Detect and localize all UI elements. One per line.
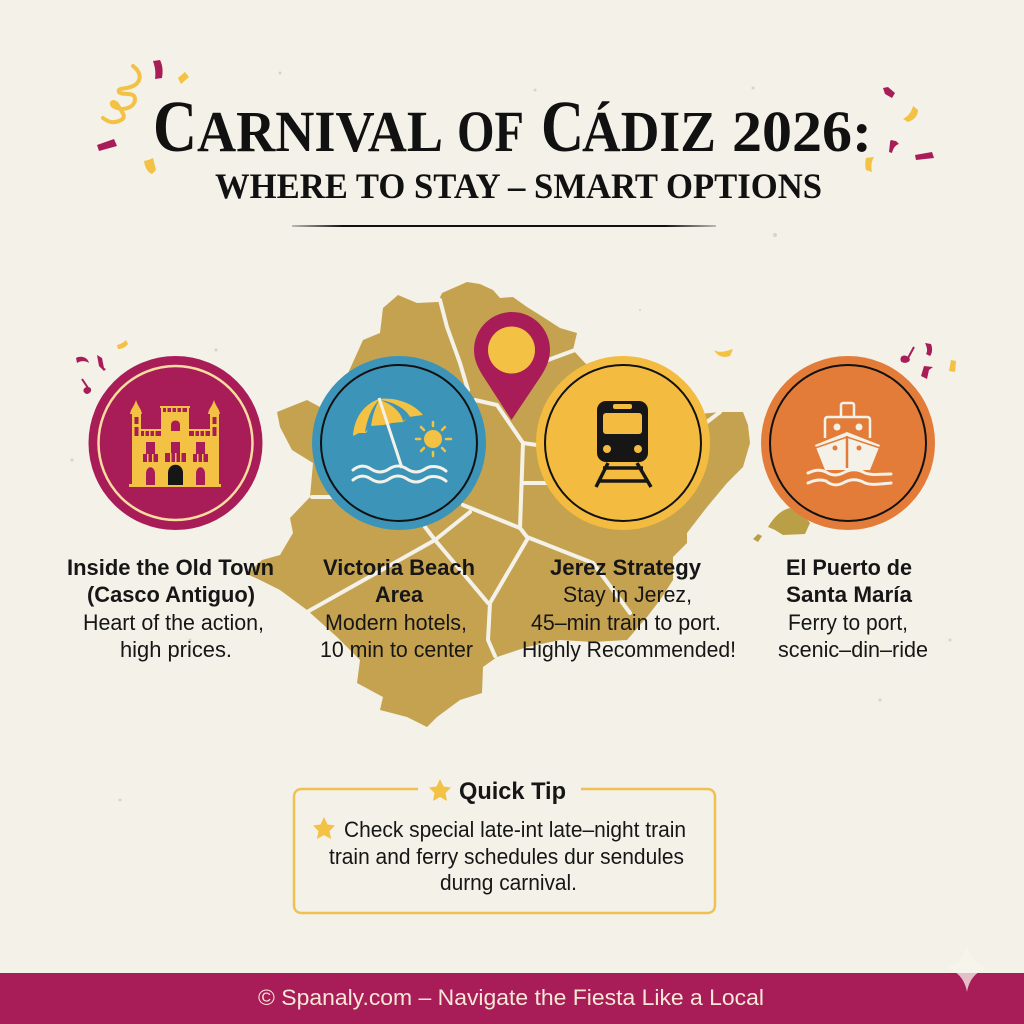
text block: el puerto: scenic–din–ride	[778, 637, 928, 662]
tip heading: Quick Tip	[459, 778, 566, 805]
confetti: above map right	[714, 349, 733, 357]
callout: quick tip	[294, 778, 715, 913]
text block: old town: Inside the Old Town	[67, 555, 274, 580]
icon: beach umbrella	[312, 356, 486, 530]
text block: el puerto: Ferry to port,	[788, 610, 908, 635]
confetti: top right	[865, 87, 934, 172]
confetti: left of old town	[76, 340, 128, 393]
text block: old town: high prices.	[120, 637, 232, 662]
text block: victoria beach: Area	[375, 582, 424, 607]
tip body	[329, 817, 686, 895]
icon: old town castle	[88, 356, 262, 530]
text block: old town: (Casco Antiguo)	[87, 582, 255, 607]
map: district borders	[307, 300, 720, 656]
main heading: ARNIVAL	[197, 99, 443, 164]
title	[153, 86, 872, 206]
map: small island	[753, 508, 810, 542]
main heading: C	[153, 86, 197, 167]
main heading	[153, 86, 872, 167]
main heading: C	[541, 86, 584, 167]
tip body: durng carnival.	[440, 870, 577, 895]
text block: jerez strategy: Highly Recommended!	[522, 637, 736, 662]
text block: victoria beach: 10 min to center	[320, 637, 473, 662]
text block: old town: Heart of the action,	[83, 610, 264, 635]
text block: jerez strategy: Stay in Jerez,	[563, 582, 692, 607]
text block: old town	[67, 555, 274, 662]
text block: victoria beach: Victoria Beach	[323, 555, 475, 580]
text block: victoria beach	[320, 555, 475, 662]
location pin	[474, 312, 550, 420]
icon: ferry	[761, 356, 935, 530]
icon: heading star	[429, 779, 451, 801]
footer band	[0, 973, 1024, 1024]
text block: jerez strategy: 45–min train to port.	[531, 610, 721, 635]
confetti: right of ferry	[901, 343, 956, 379]
text block: jerez strategy	[522, 555, 736, 662]
confetti: top left	[97, 60, 189, 174]
tip body: train and ferry schedules dur sendules	[329, 844, 684, 869]
footer text: © Spanaly.com – Navigate the Fiesta Like a Local	[258, 985, 764, 1010]
sparkle mark	[946, 944, 988, 992]
icon: body star	[313, 817, 335, 839]
text block: el puerto	[778, 555, 928, 662]
text block: el puerto: El Puerto de	[786, 555, 912, 580]
main heading: OF	[457, 99, 524, 164]
text block: el puerto: Santa María	[786, 582, 913, 607]
main heading: 2026:	[732, 99, 872, 164]
text block: victoria beach: Modern hotels,	[325, 610, 467, 635]
text block: jerez strategy: Jerez Strategy	[550, 555, 702, 580]
subheading: WHERE TO STAY – SMART OPTIONS	[215, 166, 822, 206]
map of Cádiz province	[247, 282, 810, 727]
tip body: Check special late-int late–night train	[344, 817, 686, 842]
icon: train	[536, 356, 710, 530]
main heading: ÁDIZ	[582, 99, 716, 164]
